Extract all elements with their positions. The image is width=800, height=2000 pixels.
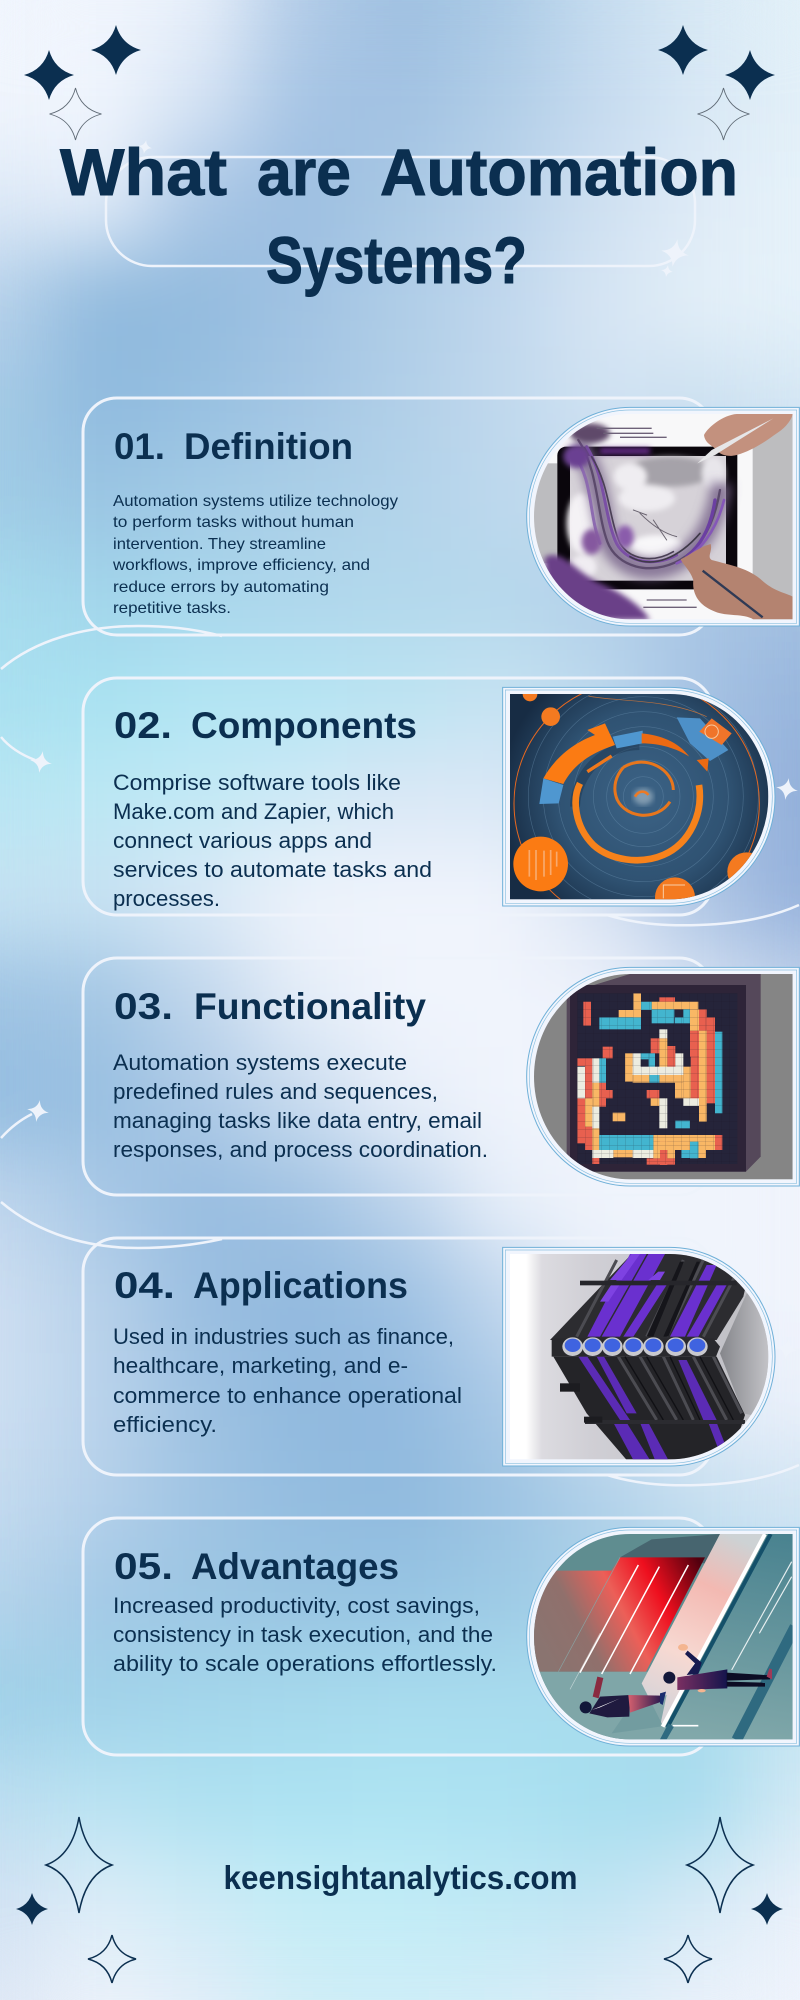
decorative connector arcs and sparkles [1, 626, 800, 1485]
image: server rack with purple cables and blue buttons [503, 1247, 777, 1466]
panel: 02 components [83, 678, 775, 926]
footer website: keensightanalytics.com [224, 1859, 578, 1896]
image: concentric orange and blue circular diagram [503, 681, 775, 926]
text: applications body: commerce to enhance operational [113, 1383, 462, 1408]
text: definition body: to perform tasks without human [113, 514, 354, 531]
text: applications body [113, 1324, 462, 1437]
heading: components: Components [191, 705, 417, 746]
title frame with sparkles [106, 139, 695, 278]
top left star cluster [24, 25, 141, 140]
image: two business people and red light panels [527, 1527, 799, 1746]
text: components body: Make.com and Zapier, which [113, 799, 394, 824]
panel: 05 advantages [83, 1518, 799, 1755]
text: functionality body: managing tasks like data entry, email [113, 1108, 482, 1133]
image: pixel tile board [527, 967, 799, 1186]
title: Automation [380, 135, 738, 209]
text: applications body: Used in industries such as finance, [113, 1324, 454, 1349]
text: functionality body: responses, and process coordination. [113, 1137, 488, 1162]
panel: 01 definition [83, 398, 799, 635]
heading: components: 02. [114, 705, 172, 746]
text: components body: services to automate tasks and [113, 857, 432, 882]
heading: advantages: Advantages [191, 1546, 399, 1587]
heading: applications: 04. [114, 1265, 175, 1306]
text: definition body: workflows, improve efficiency, and [112, 557, 370, 574]
heading: advantages: 05. [114, 1546, 173, 1587]
heading: definition: 01. [114, 426, 165, 467]
figure: person in maroon suit [580, 1677, 666, 1717]
title [60, 135, 738, 297]
bottom right star cluster [664, 1817, 783, 1983]
text: functionality body: predefined rules and sequences, [113, 1079, 438, 1104]
text: applications body: healthcare, marketing, and e- [113, 1353, 408, 1378]
text: definition body: reduce errors by automating [113, 579, 329, 596]
text: definition body: repetitive tasks. [113, 600, 231, 617]
heading: definition: Definition [184, 426, 353, 467]
text: applications body: efficiency. [113, 1412, 217, 1437]
text: definition body: Automation systems utilize technology [113, 493, 398, 510]
text: advantages body [113, 1593, 497, 1676]
text: advantages body: consistency in task execution, and the [113, 1622, 493, 1647]
heading: functionality: 03. [114, 986, 173, 1027]
figure: person in navy suit [663, 1644, 772, 1692]
text: advantages body: Increased productivity, cost savings, [113, 1593, 480, 1618]
top right star cluster [658, 25, 775, 140]
text: advantages body: ability to scale operations effortlessly. [113, 1651, 497, 1676]
text: functionality body: Automation systems execute [113, 1050, 407, 1075]
bottom left star cluster [16, 1817, 136, 1983]
title: What [60, 135, 227, 209]
text: definition body: intervention. They streamline [113, 536, 326, 553]
text: components body: connect various apps and [113, 828, 372, 853]
text: definition body [112, 493, 398, 617]
title: Systems? [266, 223, 527, 297]
heading: applications: Applications [193, 1265, 408, 1306]
text: components body: processes. [113, 886, 220, 911]
heading: functionality: Functionality [194, 986, 426, 1027]
image: tablet with purple ink painting and hands [527, 407, 799, 626]
text: components body [113, 770, 432, 911]
text: functionality body [113, 1050, 488, 1162]
panel: 04 applications [83, 1238, 777, 1475]
title: are [257, 135, 351, 209]
panel: 03 functionality [83, 958, 799, 1195]
text: components body: Comprise software tools like [113, 770, 401, 795]
